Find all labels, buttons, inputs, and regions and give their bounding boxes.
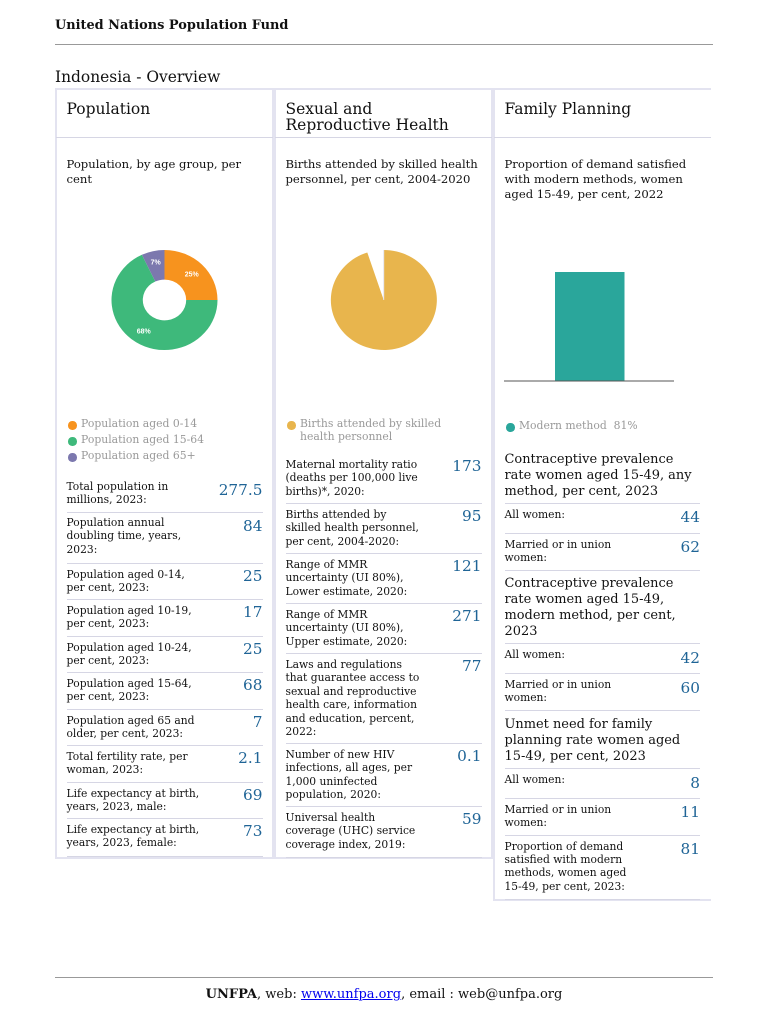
indicator list: population: 7	[253, 712, 262, 730]
indicator list: sexual and reproductive health: 59	[462, 810, 482, 828]
chart description: skilled birth attendance	[286, 157, 478, 186]
chart description: skilled birth attendance: Births attended by skilled health	[286, 157, 478, 171]
indicator list: population: woman, 2023:	[66, 763, 143, 776]
indicator list: population: 25	[243, 640, 262, 658]
indicator group: contraceptive prevalence, modern method: 2023	[504, 624, 537, 639]
indicator list: sexual and reproductive health: Lower estimate, 2020:	[286, 585, 407, 598]
indicator list: sexual and reproductive health: 95	[462, 507, 482, 525]
indicator list: sexual and reproductive health: Range of MMR	[286, 608, 367, 621]
indicator: demand satisfied: satisfied with modern	[504, 853, 622, 866]
indicator group: contraceptive prevalence, modern method: Contraceptive prevalence	[504, 576, 673, 591]
indicator list: population: 69	[243, 786, 262, 804]
panel heading: sexual and reproductive health: Sexual and	[286, 100, 372, 118]
chart description: population	[66, 157, 242, 186]
indicator list: population: Total population in	[66, 480, 168, 493]
pie chart: skilled birth attendance	[330, 250, 437, 350]
indicator group: contraceptive prevalence, any method: Contraceptive prevalence	[504, 452, 673, 467]
indicator list: population: Total fertility rate, per	[66, 750, 188, 763]
indicator list: sexual and reproductive health: births)*, 2020:	[286, 485, 365, 498]
indicator list: sexual and reproductive health: Laws and regulations	[286, 658, 402, 671]
indicator list: population: per cent, 2023:	[66, 617, 149, 630]
indicator list: sexual and reproductive health: sexual and reproductive	[286, 685, 417, 698]
indicator list: sexual and reproductive health: and education, percent,	[286, 712, 414, 725]
chart description: skilled birth attendance: personnel, per cent, 2004-2020	[286, 172, 470, 186]
indicator group: unmet need: 8	[690, 774, 700, 792]
indicator group: contraceptive prevalence, any method	[504, 452, 700, 571]
indicator: demand satisfied: methods, women aged	[504, 866, 626, 879]
header: organisation name: United Nations Population Fund	[55, 18, 288, 33]
indicator group: contraceptive prevalence, modern method: modern method, per cent,	[504, 608, 676, 623]
title: Indonesia - Overview	[55, 68, 220, 86]
indicator list: population: Population annual	[66, 516, 164, 529]
indicator list: population: per cent, 2023:	[66, 581, 149, 594]
legend: age groups: Population aged 15-64	[81, 433, 204, 446]
indicator list: population: 2023:	[66, 543, 97, 556]
indicator group: contraceptive prevalence, any method: method, per cent, 2023	[504, 484, 658, 499]
indicator group: contraceptive prevalence, modern method: 42	[681, 649, 700, 667]
chart description: population: Population, by age group, per	[66, 157, 241, 171]
indicator list: sexual and reproductive health: 121	[452, 557, 482, 575]
indicator list: population: 17	[243, 603, 262, 621]
indicator list: population: per cent, 2023:	[66, 690, 149, 703]
legend: age groups	[68, 417, 204, 462]
indicator list: population: millions, 2023:	[66, 493, 147, 506]
indicator group: unmet need: Married or in union	[504, 803, 611, 816]
donut chart: age groups: 68%	[137, 328, 151, 336]
indicator list: population: Population aged 10-19,	[66, 604, 192, 617]
legend: skilled birth attendance: Births attended by skilled	[300, 417, 441, 430]
indicator list: sexual and reproductive health: coverage index, 2019:	[286, 838, 405, 851]
indicator list: sexual and reproductive health: uncertainty (UI 80%),	[286, 621, 404, 634]
donut chart: age groups	[112, 250, 218, 350]
chart description: demand satisfied: with modern methods, women	[504, 172, 683, 186]
chart description: population: cent	[66, 172, 92, 186]
footer: UNFPA, web: www.unfpa.org, email : web@unfpa.org	[206, 987, 562, 1002]
donut chart: age groups: 25%	[185, 272, 199, 278]
indicator list: population: Population aged 15-64,	[66, 677, 192, 690]
indicator list: population: Population aged 65 and	[66, 714, 195, 726]
bar chart: modern method	[504, 272, 674, 382]
indicator group: contraceptive prevalence, modern method	[504, 576, 700, 711]
indicator: demand satisfied: 15-49, per cent, 2023:	[504, 880, 625, 893]
indicator: demand satisfied: Proportion of demand	[504, 840, 623, 852]
indicator group: contraceptive prevalence, any method: 44	[681, 508, 700, 526]
indicator list: sexual and reproductive health: uncertainty (UI 80%),	[286, 571, 404, 584]
indicator list: sexual and reproductive health: 77	[462, 657, 482, 675]
indicator group: contraceptive prevalence, modern method: rate women aged 15-49,	[504, 592, 664, 607]
indicator group: unmet need: women:	[504, 816, 547, 829]
indicator group: unmet need	[504, 717, 700, 836]
indicator: demand satisfied	[504, 835, 700, 900]
indicator list: sexual and reproductive health: per cent, 2004-2020:	[286, 535, 399, 548]
panel: family planning	[493, 88, 711, 901]
indicator list: population: per cent, 2023:	[66, 654, 149, 667]
indicator group: unmet need: 15-49, per cent, 2023	[504, 749, 646, 764]
indicator list: population: 68	[243, 676, 262, 694]
panel: population	[55, 88, 274, 859]
legend: modern method: Modern method 81%	[519, 419, 638, 432]
indicator list: sexual and reproductive health: skilled health personnel,	[286, 521, 419, 534]
indicator list: sexual and reproductive health: 2022:	[286, 725, 316, 738]
indicator list: population: Life expectancy at birth,	[66, 823, 199, 836]
indicator list: sexual and reproductive health	[286, 457, 482, 858]
indicator list: sexual and reproductive health: that guarantee access to	[286, 671, 419, 684]
indicator list: population: 84	[243, 517, 262, 535]
indicator list: population: Population aged 0-14,	[66, 568, 185, 580]
indicator list: population: 277.5	[219, 481, 262, 499]
indicator group: contraceptive prevalence, any method: women:	[504, 551, 547, 564]
indicator list: sexual and reproductive health: infections, all ages, per	[286, 761, 412, 774]
indicator list: population: 2.1	[238, 749, 262, 767]
indicator list: sexual and reproductive health: Universal health	[286, 811, 375, 824]
indicator group: contraceptive prevalence, modern method: 60	[681, 678, 700, 696]
indicator group: contraceptive prevalence, any method: All women:	[504, 508, 565, 520]
panel heading: sexual and reproductive health	[286, 100, 449, 134]
indicator group: contraceptive prevalence, any method: 62	[681, 538, 700, 556]
chart description: demand satisfied	[504, 157, 686, 201]
indicator list: sexual and reproductive health: 0.1	[457, 747, 482, 765]
indicator group: contraceptive prevalence, modern method: women:	[504, 691, 547, 704]
indicator group: unmet need: Unmet need for family	[504, 717, 652, 732]
legend: skilled birth attendance: health personnel	[300, 430, 392, 443]
indicator group: contraceptive prevalence, any method: Married or in union	[504, 538, 611, 551]
indicator list: population: Population aged 10-24,	[66, 640, 192, 654]
panel heading: population: Population	[66, 100, 150, 118]
indicator list: sexual and reproductive health: coverage (UHC) service	[286, 824, 415, 837]
indicator group: unmet need: All women:	[504, 772, 565, 786]
indicator list: population: doubling time, years,	[66, 529, 181, 542]
indicator list: sexual and reproductive health: health care, information	[286, 698, 417, 711]
indicator list: sexual and reproductive health: 1,000 uninfected	[286, 775, 377, 788]
legend: age groups: Population aged 0-14	[81, 417, 197, 430]
indicator list: sexual and reproductive health: 271	[452, 607, 482, 625]
indicator group: contraceptive prevalence, any method: rate women aged 15-49, any	[504, 468, 692, 483]
panel heading: sexual and reproductive health: Reproductive Health	[286, 116, 449, 134]
indicator group: unmet need: planning rate women aged	[504, 733, 680, 748]
indicator list: population: 25	[243, 566, 262, 584]
indicator list: sexual and reproductive health: (deaths per 100,000 live	[286, 471, 418, 484]
chart description: demand satisfied: aged 15-49, per cent, 2022	[504, 187, 663, 201]
indicator list: sexual and reproductive health: Births attended by	[286, 508, 386, 521]
chart description: demand satisfied: Proportion of demand satisfied	[504, 157, 686, 171]
panel heading: family planning: Family Planning	[504, 100, 631, 118]
donut chart: age groups: 7%	[151, 260, 162, 266]
legend: skilled birth attendance	[287, 417, 441, 443]
panel: sexual and reproductive health	[274, 88, 493, 859]
indicator list: population	[66, 480, 263, 857]
indicator list: sexual and reproductive health: population, 2020:	[286, 788, 381, 801]
indicator list: population: older, per cent, 2023:	[66, 727, 183, 740]
indicator list: sexual and reproductive health: Range of MMR	[286, 558, 367, 571]
indicator list: sexual and reproductive health: 173	[452, 457, 482, 475]
indicator list: sexual and reproductive health: Number of new HIV	[286, 748, 394, 761]
legend: age groups: Population aged 65+	[81, 449, 196, 462]
indicator list: population: years, 2023, female:	[66, 836, 177, 849]
indicator group: contraceptive prevalence, modern method: All women:	[504, 648, 565, 660]
indicator list: sexual and reproductive health: Upper estimate, 2020:	[286, 635, 407, 648]
indicator list: sexual and reproductive health: Maternal mortality ratio	[286, 458, 417, 471]
indicator list: population: years, 2023, male:	[66, 800, 166, 813]
indicator group: contraceptive prevalence, modern method: Married or in union	[504, 678, 611, 691]
indicator list: population: 73	[243, 822, 262, 840]
indicator list: population: Life expectancy at birth,	[66, 786, 199, 800]
indicator: demand satisfied: 81	[681, 840, 700, 858]
indicator group: unmet need: 11	[681, 802, 700, 820]
